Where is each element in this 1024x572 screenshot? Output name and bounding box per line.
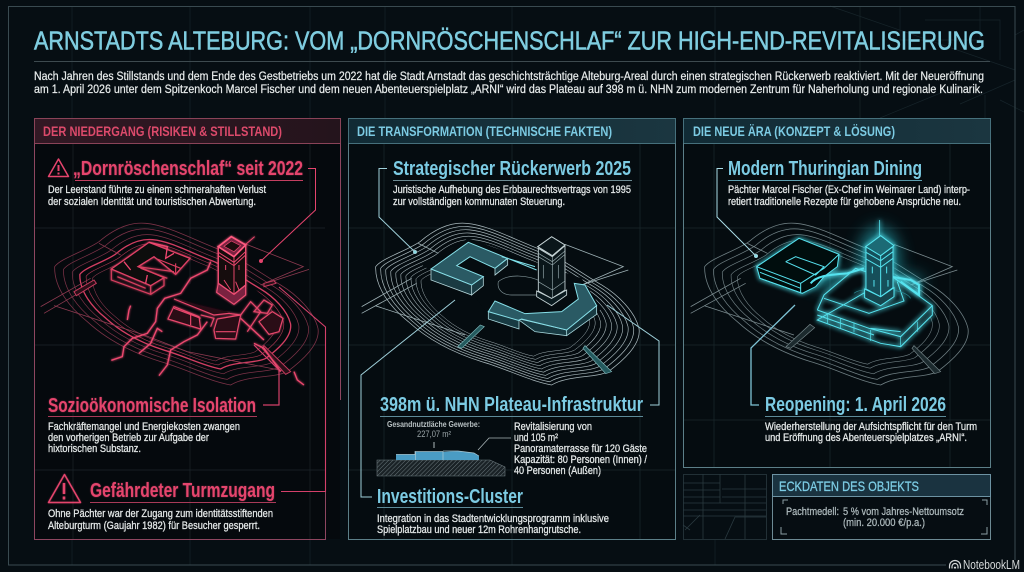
text block: Panoramaterrasse: Panoramaterrasse für 120 Gäste xyxy=(514,443,647,455)
text block: Turmzugang: Ohne Pächter war der Zugang zum identitätsstiftenden xyxy=(48,508,273,520)
text block: Investitions-Cluster: Integration in das Stadtentwicklungsprogramm inklusive xyxy=(377,513,609,525)
text block: Rückerwerb xyxy=(393,157,632,208)
text block: Reopening: und Eröffnung des Abenteuerspielplatzes „ARNI“. xyxy=(765,432,967,444)
text block: Modern Dining: Modern Thuringian Dining xyxy=(728,157,922,180)
arrow: leader Plateau xyxy=(607,305,659,405)
icon: warning triangle xyxy=(48,159,68,176)
text block: Modern Dining xyxy=(728,157,970,208)
text block: Rückerwerb: Strategischer Rückerwerb 2025 xyxy=(393,157,631,180)
text block: Panoramaterrasse: Revitalisierung von xyxy=(514,421,592,433)
panel heading: Transformation: DIE TRANSFORMATION (TECHNISCHE FAKTEN) xyxy=(357,123,612,139)
text block: Isolation: hixtorischen Substanz. xyxy=(48,443,141,455)
text block: Investitions-Cluster xyxy=(377,485,609,536)
text block: Rückerwerb: zur vollständigen kommunaten Steuerung. xyxy=(393,196,565,208)
lease model text: (min. 20.000 €/p.a.) xyxy=(843,517,925,529)
lease model text: Pachtmedell: xyxy=(786,506,839,518)
chart: terrain cross-section xyxy=(377,419,511,476)
panel heading: Eckdaten: ECKDATEN DES OBJEKTS xyxy=(779,478,919,494)
text block: Investitions-Cluster: Spielplatzbau und neuer 12m Rohrenhangrutsche. xyxy=(377,524,581,536)
text block: Reopening: Wiederherstellung der Aufsichtspflicht für den Turm xyxy=(765,421,977,433)
text block: Isolation: Sozioökonomische Isolation xyxy=(48,394,256,417)
arrow: leader Isolation xyxy=(254,345,279,405)
icon: warning triangle large xyxy=(48,474,80,502)
icon: NotebookLM arcs xyxy=(950,560,960,568)
panel heading: Niedergang: DER NIEDERGANG (RISIKEN & STILLSTAND) xyxy=(43,123,282,139)
arrow: leader Turmzugang xyxy=(279,287,326,492)
corner brackets xyxy=(781,500,987,534)
text block: Dornröschenschlaf: „Dornröschenschlaf“ seit 2022 xyxy=(73,157,303,180)
blueprint detail tile xyxy=(683,474,766,540)
text block: Rückerwerb: Juristische Aufhebung des Erbbaurechtsvertrags von 1995 xyxy=(393,184,631,196)
panel: die neue Ära xyxy=(683,118,990,468)
text block: Reopening xyxy=(765,393,977,444)
panel: die Transformation xyxy=(348,118,676,540)
text block: Panoramaterrasse: 40 Personen (Außen) xyxy=(514,465,601,477)
arrow: leader Dornröschenschlaf xyxy=(260,168,316,262)
text block: Isolation xyxy=(48,394,257,455)
text block: Isolation: Fachkräftemangel und Energiekosten zwangen xyxy=(48,421,240,433)
lease model text: 5 % vom Jahres-Nettoumsotz xyxy=(843,506,964,518)
text block: Panoramaterrasse: Kapazität: 80 Personen (Innen) / xyxy=(514,454,648,466)
text block: Panoramaterrasse xyxy=(514,421,648,477)
heading: Plateau: 398m ü. NHN Plateau-Infrastruktur xyxy=(380,393,643,416)
text block: Turmzugang: Alteburgturm (Gaujahr 1982) für Besucher gesperrt. xyxy=(48,520,260,532)
chart: terrain cross-section: Gesandnutztläche Gewerbe: xyxy=(387,419,480,429)
panel: der Niedergang xyxy=(34,118,340,540)
arrow: leader Rückerwerb xyxy=(379,168,416,254)
illustration: ruined Alteburg xyxy=(41,223,318,385)
illustration: renovated site plan xyxy=(362,223,639,385)
text block: Modern Dining: retiert traditionelle Rezepte für gehobene Ansprüche neu. xyxy=(728,196,961,208)
illustration: revitalised Alteburg glowing xyxy=(691,220,968,385)
text block: Isolation: den vorherigen Betrieb zur Aufgabe der xyxy=(48,432,209,444)
arrow: leader Modern Dining xyxy=(717,168,758,258)
arrow: leader Reopening xyxy=(751,305,795,405)
text block: Turmzugang: Gefährdeter Turmzugang xyxy=(90,479,275,502)
text block: Turmzugang xyxy=(48,474,276,532)
intro text xyxy=(34,69,984,96)
text block: Dornröschenschlaf: Der Leerstand führte zu einem schmerahaften Verlust xyxy=(48,184,266,196)
text block: Reopening: Reopening: 1. April 2026 xyxy=(765,393,946,416)
lease model text xyxy=(786,506,964,529)
text block: Dornröschenschlaf: der sozialen Identität und touristischen Abwertung. xyxy=(48,196,256,208)
panel heading: neue Ära: DIE NEUE ÄRA (KONZEPT & LÖSUNG) xyxy=(693,123,895,139)
text block: Panoramaterrasse: und 105 m² xyxy=(514,432,558,444)
text block: Dornröschenschlaf xyxy=(48,157,303,208)
panel: Eckdaten des Objekts xyxy=(772,474,990,540)
text block: Investitions-Cluster: Investitions-Cluster xyxy=(377,485,523,508)
chart: terrain cross-section: 227,07 m² xyxy=(417,429,451,439)
arrow: leader Investitions-Cluster xyxy=(361,300,455,497)
text block: Modern Dining: Pächter Marcel Fischer (Ex-Chef im Weimarer Land) interp- xyxy=(728,184,970,196)
